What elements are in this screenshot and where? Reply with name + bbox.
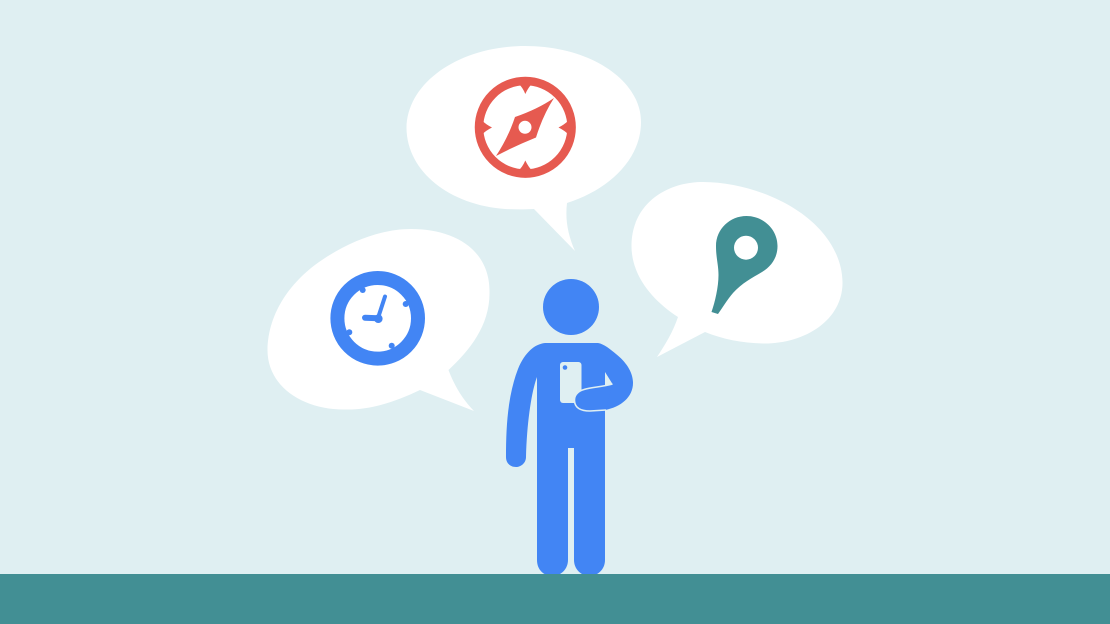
speech bubble: left	[268, 229, 490, 411]
icon: compass	[479, 81, 572, 174]
head	[543, 279, 599, 335]
icon: map pin	[712, 216, 778, 314]
person	[506, 279, 633, 576]
speech bubble: top	[406, 46, 641, 251]
smartphone	[560, 362, 582, 403]
forearm	[574, 384, 612, 411]
speech bubble: right	[631, 182, 843, 357]
icon: clock	[337, 278, 418, 359]
gap between arm and torso	[605, 372, 612, 386]
ground band	[0, 574, 1110, 624]
torso, legs and arms	[506, 343, 633, 576]
